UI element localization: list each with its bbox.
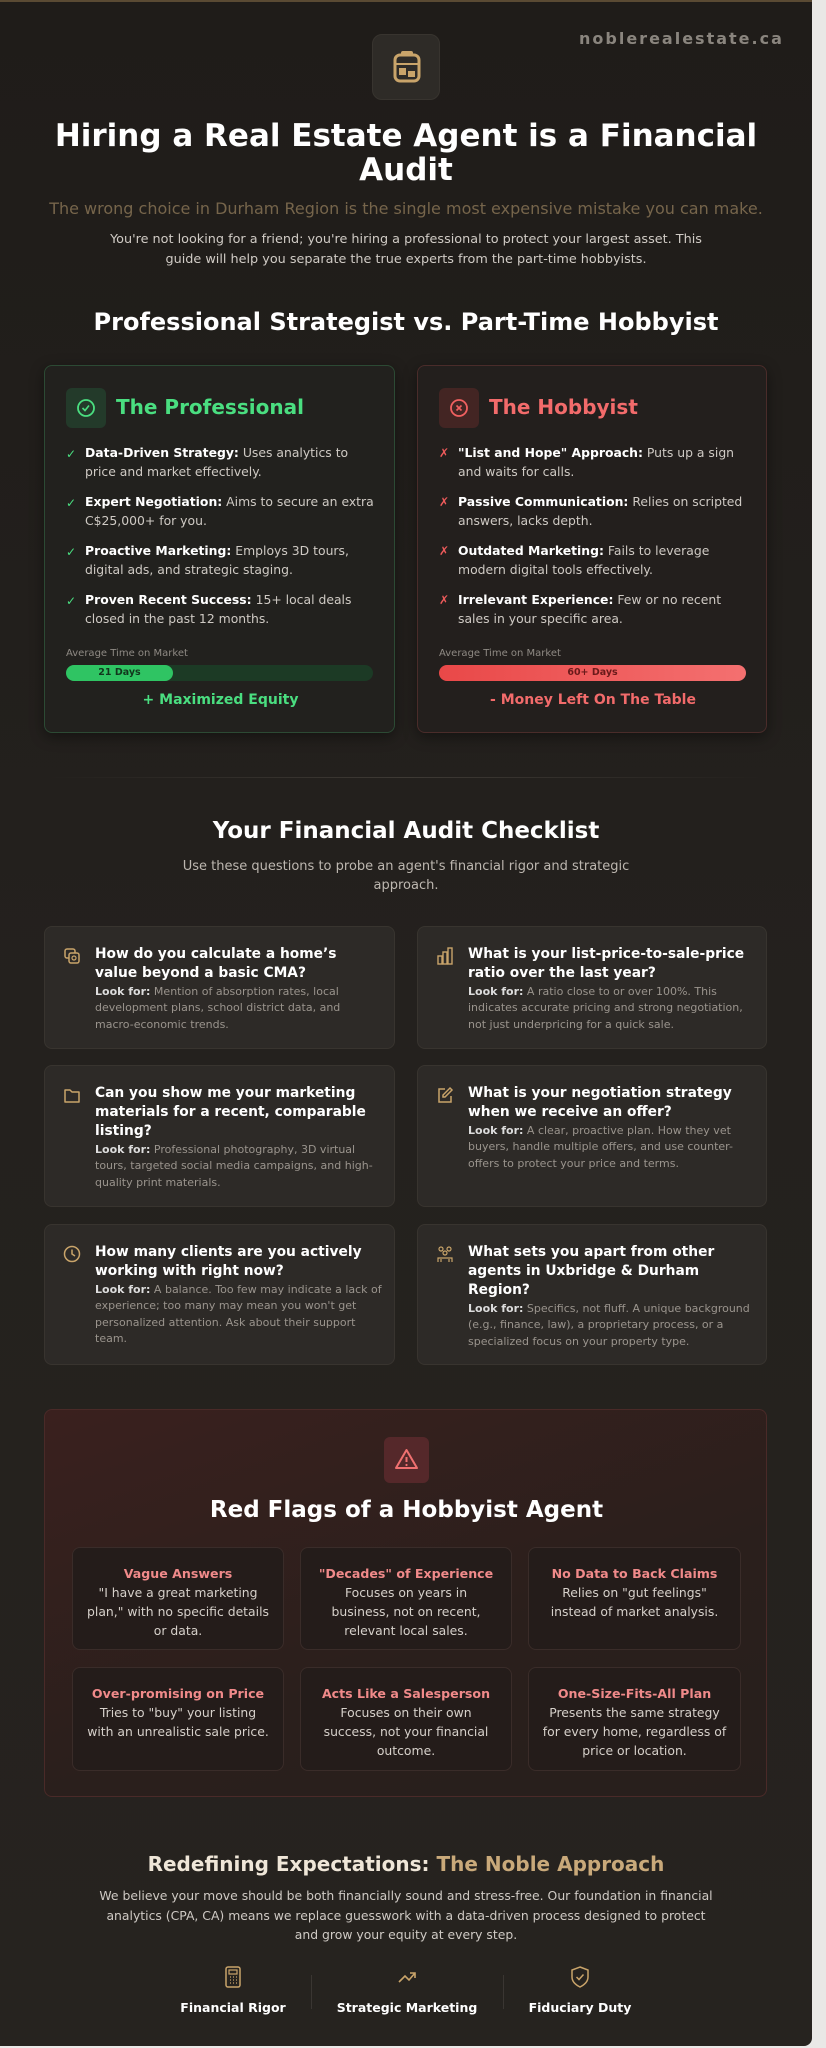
panel: red flags <box>44 1409 767 1797</box>
list: professional traits: Proven Recent Success: 15+ local deals closed in the past 12 months. <box>85 592 351 626</box>
pillar: fiduciary duty <box>529 1966 632 2015</box>
flag: one-size: for every home, regardless of price or location. <box>543 1724 726 1758</box>
card: q6: Look for: Specifics, not fluff. A unique background (e.g., finance, law), a proprietary process, or a specialized focus on your property type. <box>468 1302 750 1348</box>
heading: comparison: Professional Strategist vs. Part-Time Hobbyist <box>94 308 718 336</box>
list: professional traits: ✓ <box>66 447 76 461</box>
outcome: money left: - Money Left On The Table <box>490 692 696 708</box>
flag: over-promising: Tries to "buy" your listing with an unrealistic sale price. <box>87 1705 269 1739</box>
list: professional traits: Proactive Marketing: Employs 3D tours, digital ads, and strategic staging. <box>85 543 349 577</box>
list: hobbyist traits: ✗ <box>439 593 449 607</box>
bar: time on market 60+ days: 60+ Days <box>567 667 618 678</box>
icon: calculator <box>225 1966 241 1988</box>
list: professional traits: ✓ <box>66 496 76 510</box>
icon: clock <box>64 1246 80 1262</box>
card: q4 <box>417 1065 767 1207</box>
flag: vague answers: "I have a great marketing plan," with no specific details or data. <box>87 1585 269 1638</box>
bar: time on market 60+ days <box>439 648 746 681</box>
card: q4: What is your negotiation strategy when we receive an offer? <box>468 1085 732 1120</box>
card: q3: Can you show me your marketing materials for a recent, comparable listing? <box>95 1085 366 1139</box>
checklist intro: Use these questions to probe an agent's financial rigor and strategic approach. <box>183 859 629 893</box>
list: hobbyist traits: ✗ <box>439 544 449 558</box>
heading: the hobbyist: The Hobbyist <box>489 395 638 419</box>
card: q6 <box>417 1224 767 1365</box>
list: professional traits: ✓ <box>66 594 76 608</box>
heading: the professional: The Professional <box>116 395 304 419</box>
flag: over-promising <box>72 1667 284 1771</box>
flag: decades <box>300 1547 512 1650</box>
flag: salesperson: Focuses on their own success, not your financial outcome. <box>324 1705 488 1758</box>
pillar: strategic marketing <box>337 1972 477 2015</box>
card: q3 <box>44 1065 395 1207</box>
icon: folder <box>64 1089 80 1103</box>
list: hobbyist traits <box>439 445 742 626</box>
heading: noble approach: Redefining Expectations: The Noble Approach <box>148 1852 664 1876</box>
icon: edit <box>438 1087 453 1103</box>
outcome: maximized equity: + Maximized Equity <box>143 692 298 708</box>
flag: no data: No Data to Back Claims <box>552 1566 717 1581</box>
card: q1: Look for: Mention of absorption rates, local development plans, school district data, and macro-economic trends. <box>95 985 340 1031</box>
flag: vague answers <box>72 1547 284 1650</box>
domain label: noblerealestate.ca <box>579 29 784 48</box>
approach text: We believe your move should be both financially sound and stress-free. Our foundation in financial analytics (CPA, CA) means we replace guesswork with a data-driven process designed to protect and grow your equity at every step. <box>99 1888 713 1942</box>
flag: one-size: Presents the same strategy <box>549 1705 720 1720</box>
pillar: fiduciary duty: Fiduciary Duty <box>529 2000 631 2015</box>
icon: warning <box>384 1437 429 1483</box>
icon: x circle <box>439 388 479 428</box>
flag: salesperson <box>300 1667 512 1771</box>
bar: time on market 21 days: 21 Days <box>98 667 141 678</box>
intro text: You're not looking for a friend; you're hiring a professional to protect your largest asset. This guide will help you separate the true experts from the part-time hobbyists. <box>110 232 702 266</box>
icon: shield <box>571 1966 589 1988</box>
flag: no data: Relies on "gut feelings" instead of market analysis. <box>551 1585 718 1619</box>
panel: professional <box>44 365 395 733</box>
list: hobbyist traits: Irrelevant Experience: Few or no recent sales in your specific area. <box>458 592 721 626</box>
list: hobbyist traits: "List and Hope" Approach: Puts up a sign and waits for calls. <box>458 445 734 479</box>
list: hobbyist traits: Outdated Marketing: Fails to leverage modern digital tools effectively. <box>458 543 709 577</box>
heading: red flags: Red Flags of a Hobbyist Agent <box>210 1497 603 1523</box>
flag: one-size: One-Size-Fits-All Plan <box>558 1686 711 1701</box>
bar: time on market 60+ days: Average Time on Market <box>439 648 561 659</box>
card: q5: Look for: A balance. Too few may indicate a lack of experience; too many may mean you won't get personalized attention. Ask about their support team. <box>95 1283 382 1345</box>
list: hobbyist traits: ✗ <box>439 495 449 509</box>
card: q3: Look for: Professional photography, 3D virtual tours, targeted social media campaigns, and high-quality print materials. <box>95 1143 373 1189</box>
flag: decades: "Decades" of Experience <box>319 1566 493 1581</box>
list: hobbyist traits: ✗ <box>439 446 449 460</box>
card: q5: How many clients are you actively working with right now? <box>95 1244 362 1279</box>
pillar: strategic marketing: Strategic Marketing <box>337 2000 477 2015</box>
icon: check circle <box>66 388 106 428</box>
flag: one-size <box>528 1667 741 1771</box>
card: q2: Look for: A ratio close to or over 100%. This indicates accurate pricing and strong negotiation, not just underpricing for a quick sale. <box>468 985 743 1031</box>
heading: checklist: Your Financial Audit Checklist <box>213 818 599 844</box>
list: professional traits: Expert Negotiation: Aims to secure an extra C$25,000+ for you. <box>85 494 374 528</box>
flag: over-promising: Over-promising on Price <box>92 1686 264 1701</box>
icon: coins <box>64 948 80 964</box>
flag: decades: Focuses on years in business, not on recent, relevant local sales. <box>331 1585 480 1638</box>
card: q2 <box>417 926 767 1049</box>
icon: people <box>437 1246 453 1262</box>
panel: hobbyist <box>417 365 767 733</box>
card: q2: What is your list-price-to-sale-price ratio over the last year? <box>468 946 744 981</box>
list: professional traits <box>66 445 374 626</box>
bar: time on market 21 days <box>66 648 373 681</box>
pillar: financial rigor <box>180 1966 286 2015</box>
flag: salesperson: Acts Like a Salesperson <box>322 1686 490 1701</box>
subtitle: The wrong choice in Durham Region is the single most expensive mistake you can make. <box>49 199 763 218</box>
flag: vague answers: Vague Answers <box>124 1566 232 1581</box>
title: Hiring a Real Estate Agent is a Financial Audit <box>55 118 757 188</box>
card: q4: Look for: A clear, proactive plan. How they vet buyers, handle multiple offers, and use counter-offers to protect your price and terms. <box>468 1124 733 1170</box>
icon: briefcase <box>372 34 440 100</box>
bar: time on market 21 days: Average Time on Market <box>66 648 188 659</box>
flag: no data <box>528 1547 741 1650</box>
pillar: financial rigor: Financial Rigor <box>180 2000 286 2015</box>
card: q5 <box>44 1224 395 1365</box>
icon: trending up <box>398 1972 416 1983</box>
list: professional traits: ✓ <box>66 545 76 559</box>
card: q6: What sets you apart from other agents in Uxbridge & Durham Region? <box>468 1244 714 1298</box>
card: q1: How do you calculate a home’s value beyond a basic CMA? <box>95 946 336 981</box>
card: q1 <box>44 926 395 1049</box>
icon: bar chart <box>437 947 453 965</box>
list: hobbyist traits: Passive Communication: Relies on scripted answers, lacks depth. <box>458 494 742 528</box>
list: professional traits: Data-Driven Strategy: Uses analytics to price and market effectively. <box>85 445 348 479</box>
